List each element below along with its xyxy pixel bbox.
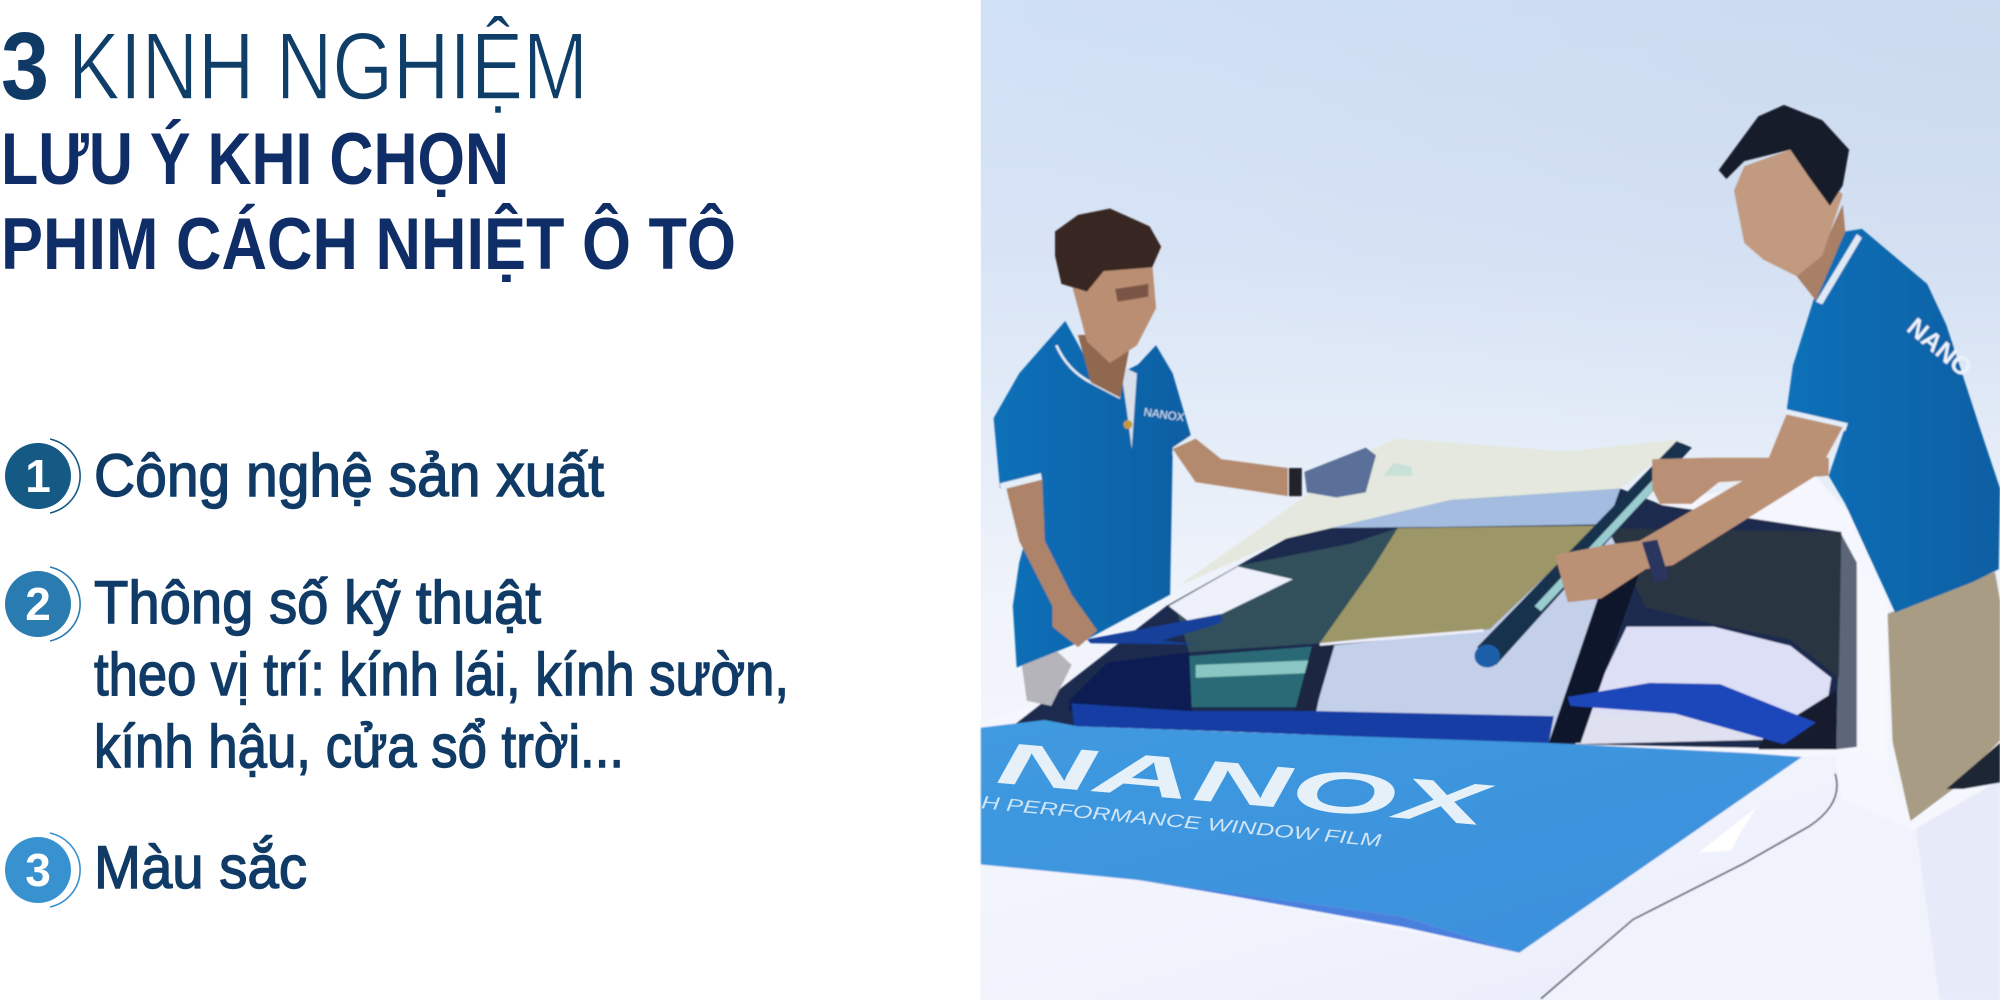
pale panel — [1312, 526, 1622, 742]
placket — [1120, 366, 1137, 449]
wristband — [1289, 468, 1302, 496]
upper reflection band — [1286, 489, 1620, 538]
face — [1072, 262, 1156, 363]
panel: white background — [0, 0, 981, 1000]
left arm and hand — [1006, 480, 1097, 647]
title number 3: 3 — [1, 13, 49, 120]
glass base — [1015, 489, 1841, 749]
banner tagline: H PERFORMANCE WINDOW FILM — [980, 792, 1382, 851]
text: kính hậu: kính hậu, cửa sổ trời... — [94, 713, 624, 780]
collar piping — [1056, 345, 1120, 398]
glare on film — [1320, 630, 1483, 645]
glare white — [1169, 567, 1293, 627]
hair — [1719, 105, 1849, 206]
text: Thông số kỹ thuật: Thông số kỹ thuật — [94, 569, 541, 636]
shirt logo: NANOX — [1143, 407, 1185, 424]
left technician — [994, 208, 1302, 706]
banner hood highlight — [1698, 807, 1757, 853]
shirt — [994, 321, 1192, 668]
badge 2: 2 — [25, 578, 51, 630]
badge 2 — [5, 567, 80, 641]
far arm — [1652, 458, 1829, 504]
list item 3 — [5, 833, 307, 907]
right interior dark — [1607, 528, 1841, 678]
title line: KINH NGHIỆM: KINH NGHIỆM — [68, 13, 588, 120]
badge 1 — [5, 439, 80, 513]
interior dark green — [1176, 528, 1407, 652]
trousers — [1888, 572, 2000, 821]
dark glass corner — [1758, 691, 1836, 749]
hair — [1055, 208, 1161, 292]
car side mirror — [1946, 743, 2000, 789]
right arm — [1173, 439, 1288, 496]
dark pillar — [1549, 543, 1650, 743]
sleeve trim — [1785, 409, 1848, 431]
film backing strip — [1087, 614, 1221, 645]
watch — [1642, 540, 1669, 583]
car body — [981, 477, 2000, 1000]
list item 2 — [5, 567, 789, 780]
near arm and hand — [1555, 414, 1843, 602]
title line: LƯU Ý KHI CHỌN: LƯU Ý KHI CHỌN — [1, 119, 509, 200]
dark A-pillar strip — [1294, 643, 1335, 714]
badge 1: 1 — [25, 450, 51, 502]
hood seam lines — [1541, 774, 1837, 999]
spray bottle and trousers — [1019, 646, 1072, 706]
title — [1, 13, 736, 285]
blue towel on dashboard — [1072, 683, 1816, 744]
photo background — [981, 0, 2000, 1000]
banner brand text: NANOX: NANOX — [994, 731, 1499, 839]
list item 1 — [5, 439, 604, 513]
photo panel: two technicians fitting film on a white car — [980, 0, 2000, 1000]
brow and eye — [1115, 284, 1148, 302]
blue NanoX banner — [981, 720, 1802, 953]
mustard film area — [1320, 526, 1598, 643]
right technician — [1555, 105, 2000, 821]
neck — [1797, 205, 1845, 301]
film roll — [1474, 441, 1692, 668]
sleeve trims — [1000, 473, 1042, 492]
text: theo vị trí: theo vị trí: kính lái, kính sườn, — [94, 641, 789, 708]
neck — [1078, 335, 1132, 398]
right pale reflection — [1575, 627, 1831, 735]
film sheet — [1179, 439, 1685, 586]
face — [1734, 150, 1843, 276]
shirt logo: NANO — [1902, 313, 1977, 383]
shirt — [1786, 229, 2000, 613]
badge 3: 3 — [25, 844, 51, 896]
left interior shadow — [1069, 652, 1192, 711]
title line: PHIM CÁCH NHIỆT Ô TÔ: PHIM CÁCH NHIỆT Ô TÔ — [1, 204, 736, 285]
text: Màu sắc: Màu sắc — [94, 834, 307, 901]
text: Công nghệ sản xuất: Công nghệ sản xuất — [94, 442, 604, 509]
badge 3 — [5, 833, 80, 907]
strip under dashboard — [1575, 714, 1790, 744]
teal interior patch — [1189, 646, 1322, 707]
windshield glass — [1015, 489, 1841, 749]
collar stripe — [1816, 234, 1862, 304]
glove — [1304, 448, 1376, 497]
